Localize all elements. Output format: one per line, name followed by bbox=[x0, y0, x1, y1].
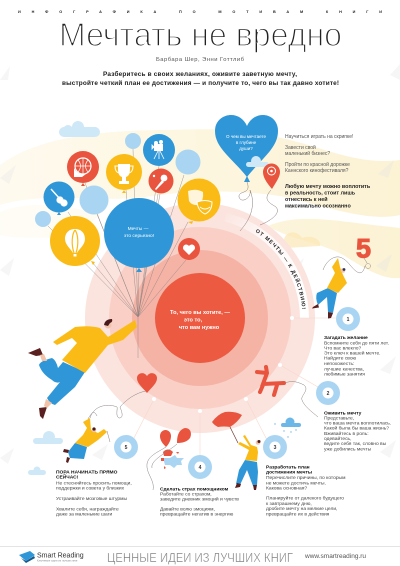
step 1 text: непохожесть: bbox=[324, 362, 354, 367]
step 2 text: уже добились мечты bbox=[324, 446, 372, 452]
step 4 text: превращайте негатив в энергию bbox=[160, 510, 234, 518]
balloon number 5 bbox=[323, 234, 371, 273]
step 3 text: не можете достичь мечты. bbox=[266, 482, 326, 486]
right question list: Каннского кинофестиваля? bbox=[285, 168, 349, 174]
step 5 text: СЕЙЧАС! bbox=[56, 472, 79, 480]
balloon caption bbox=[124, 226, 154, 239]
step 5 text: даже за маленькие шаги bbox=[56, 512, 113, 518]
heart question text bbox=[226, 134, 266, 151]
arc text: ОТ МЕЧТЫ — К ДЕЙСТВИЮ! bbox=[256, 229, 306, 309]
kicker: ИНФОГРАФИКА ПО МОТИВАМ КНИГИ bbox=[18, 10, 382, 14]
step 2 text: ведите себя так, словно вы bbox=[324, 441, 387, 447]
step 5: 5 bbox=[125, 445, 128, 451]
step 3 text: Какова основная? bbox=[266, 486, 307, 492]
connector lines bbox=[134, 316, 336, 455]
sweater bbox=[53, 320, 137, 373]
step 1 text: лучшие качества, bbox=[324, 368, 364, 372]
footer logo: Smart Reading bbox=[37, 552, 84, 560]
balloon: heart bbox=[178, 238, 200, 260]
step 5 text: Хвалите себя, награждайте bbox=[56, 506, 119, 512]
step 1 text: Это ключ к вашей мечте. bbox=[324, 350, 381, 356]
step 5 text: ПОРА НАЧИНАТЬ ПРЯМО bbox=[56, 470, 118, 476]
person climbing string bbox=[312, 258, 347, 318]
conclusion: отнестись к ней bbox=[285, 196, 328, 203]
heart question text: души? bbox=[239, 146, 253, 151]
heart question text: в глубине bbox=[236, 140, 257, 145]
trousers bbox=[68, 443, 87, 459]
step 2 bbox=[316, 381, 391, 452]
shoes bbox=[63, 449, 70, 463]
step 3 text: к завтрашнему дню, bbox=[266, 502, 312, 507]
step 4 text: заведите дневник эмоций и чувств bbox=[160, 496, 239, 502]
centre text bbox=[170, 310, 230, 331]
target: concentric circles bbox=[85, 204, 315, 433]
conclusion: Любую мечту можно воплотить bbox=[285, 183, 371, 190]
step 3 text bbox=[266, 464, 346, 518]
step 4: 4 bbox=[199, 465, 202, 471]
step 3 text: Перечислите причины, по которым bbox=[266, 475, 346, 481]
sweater bbox=[75, 418, 107, 447]
step 1: 1 bbox=[347, 317, 350, 323]
step 3 text: превращайте их в действия bbox=[266, 510, 330, 518]
balloon: main blue bbox=[104, 198, 174, 272]
centre circle bbox=[155, 273, 245, 363]
balloon caption: это серьезно! bbox=[124, 233, 154, 239]
popped balloons bbox=[147, 428, 191, 490]
raincloud bbox=[274, 418, 301, 438]
lead text: выстройте четкий план ее достижения — и получите то, чего вы так давно хотите! bbox=[62, 79, 339, 87]
white band for arc text bbox=[225, 217, 304, 318]
right question list: Завести свой bbox=[285, 144, 316, 151]
step 2 text bbox=[324, 410, 391, 452]
balloon number 5: 5 bbox=[356, 234, 371, 264]
shoes bbox=[312, 304, 333, 318]
title: Мечтать не вредно bbox=[59, 17, 342, 54]
watermark logos bbox=[0, 64, 400, 464]
balloon: guitar bbox=[44, 182, 74, 215]
sweater bbox=[327, 258, 347, 293]
falling person with string bbox=[63, 412, 110, 463]
step 1 text: Что вас влекло? bbox=[324, 346, 361, 352]
footer slogan: ЦЕННЫЕ ИДЕИ ИЗ ЛУЧШИХ КНИГ bbox=[107, 550, 293, 565]
balloon: camera bbox=[143, 134, 175, 166]
step 3 text: дробите мечту на мелкие цели, bbox=[266, 506, 337, 512]
step 2 text: Представьте, bbox=[324, 416, 354, 422]
small cloud bbox=[246, 156, 269, 167]
centre text: То, чего вы хотите, — bbox=[170, 310, 230, 316]
step 1 text: Загадать желание bbox=[324, 335, 368, 341]
step 2 text: Вживайтесь в роль: bbox=[324, 430, 369, 437]
balloon: globe bbox=[67, 151, 99, 186]
step 3 text: достижения мечты bbox=[266, 470, 312, 476]
footer logo: Ключевые идеи из лучших книг bbox=[37, 558, 78, 562]
step 5 text bbox=[56, 470, 132, 518]
step 4 text: Сделать страх помощником bbox=[160, 486, 229, 492]
header bbox=[18, 10, 382, 87]
centre text: что вам нужно bbox=[179, 325, 220, 331]
sweater bbox=[238, 435, 258, 461]
footer bbox=[0, 546, 400, 565]
step 5 bbox=[56, 435, 138, 518]
step 3: 3 bbox=[274, 445, 277, 451]
background: cream waves bbox=[0, 129, 400, 278]
balloon: theatre masks bbox=[178, 178, 220, 224]
shoes bbox=[235, 483, 257, 490]
trousers bbox=[316, 288, 337, 313]
step 5 text: Не стесняйтесь просить помощи, bbox=[56, 480, 132, 486]
trousers bbox=[39, 358, 85, 405]
dog balloon bbox=[257, 367, 318, 417]
step 1 bbox=[324, 307, 389, 378]
step 2: 2 bbox=[327, 391, 330, 397]
step 1 text: Вспомните себя до пяти лет. bbox=[324, 340, 389, 346]
authors: Барбара Шер, Энни Готтлиб bbox=[156, 57, 245, 63]
balloon: light blue large top bbox=[176, 150, 200, 174]
step 5 text: Устраивайте мозговые штурмы bbox=[56, 495, 127, 502]
conclusion: в реальность, стоит лишь bbox=[285, 190, 356, 196]
flying person holding balloons bbox=[28, 319, 137, 419]
footer logo bbox=[19, 551, 84, 563]
step 1 text: Найдите свою bbox=[324, 354, 357, 362]
trousers bbox=[236, 460, 258, 486]
cloud top left bbox=[59, 121, 100, 137]
step 4 bbox=[160, 455, 239, 518]
step 2 text: Оживить мечту bbox=[324, 410, 362, 416]
small heart balloon bbox=[88, 373, 157, 419]
right question list bbox=[285, 134, 371, 210]
step 3 text: Разработать план bbox=[266, 464, 310, 470]
balloon: light blue small bbox=[125, 133, 141, 149]
step 1 text: любимые занятия bbox=[324, 372, 365, 378]
step 4 text bbox=[160, 486, 239, 518]
balloon strings bbox=[48, 149, 188, 358]
background: yellow cloud bbox=[284, 232, 320, 248]
lead text: Разберитесь в своих желаниях, оживите заветную мечту, bbox=[103, 70, 297, 78]
person with umbrella bbox=[212, 412, 260, 490]
balloon: light blue left bbox=[35, 211, 51, 227]
step 3 bbox=[263, 435, 346, 518]
step 2 text: что ваша мечта воплотилась. bbox=[324, 422, 391, 426]
step 4 text: Давайте волю эмоциям, bbox=[160, 506, 215, 512]
step 2 text: Какой была бы ваша жизнь? bbox=[324, 424, 389, 432]
step 1 text bbox=[324, 335, 389, 378]
step 5 text: поддержки и совета у близких bbox=[56, 486, 125, 492]
right question list: Пройти по красной дорожке bbox=[285, 161, 350, 168]
step 2 text: одевайтесь, bbox=[324, 435, 351, 442]
step 4 text: Работайте со страхом, bbox=[160, 490, 212, 498]
footer url: www.smartreading.ru bbox=[304, 553, 366, 560]
shoes bbox=[28, 348, 47, 419]
balloon cluster bbox=[35, 133, 220, 272]
right question list: Научиться играть на скрипке! bbox=[285, 134, 353, 140]
step 3 text: Планируйте от далекого будущего bbox=[266, 494, 344, 502]
conclusion bbox=[285, 183, 371, 210]
balloon: hot-air bbox=[50, 216, 100, 266]
umbrella bbox=[212, 412, 242, 427]
balloon caption: Мечты — bbox=[128, 226, 149, 232]
centre text: это то, bbox=[184, 318, 203, 324]
balloon: trophy bbox=[106, 154, 142, 193]
heart question text: О чем вы мечтаете bbox=[226, 134, 266, 139]
heart balloon with question bbox=[215, 115, 278, 231]
conclusion: максимально осознанно bbox=[285, 204, 351, 210]
clouds bottom left bbox=[28, 431, 63, 475]
pin balloon bbox=[260, 164, 280, 225]
balloon: light blue middle bbox=[80, 186, 108, 214]
balloon: microphone bbox=[148, 168, 174, 194]
lead text bbox=[62, 70, 339, 87]
right question list: маленький бизнес? bbox=[285, 150, 330, 157]
